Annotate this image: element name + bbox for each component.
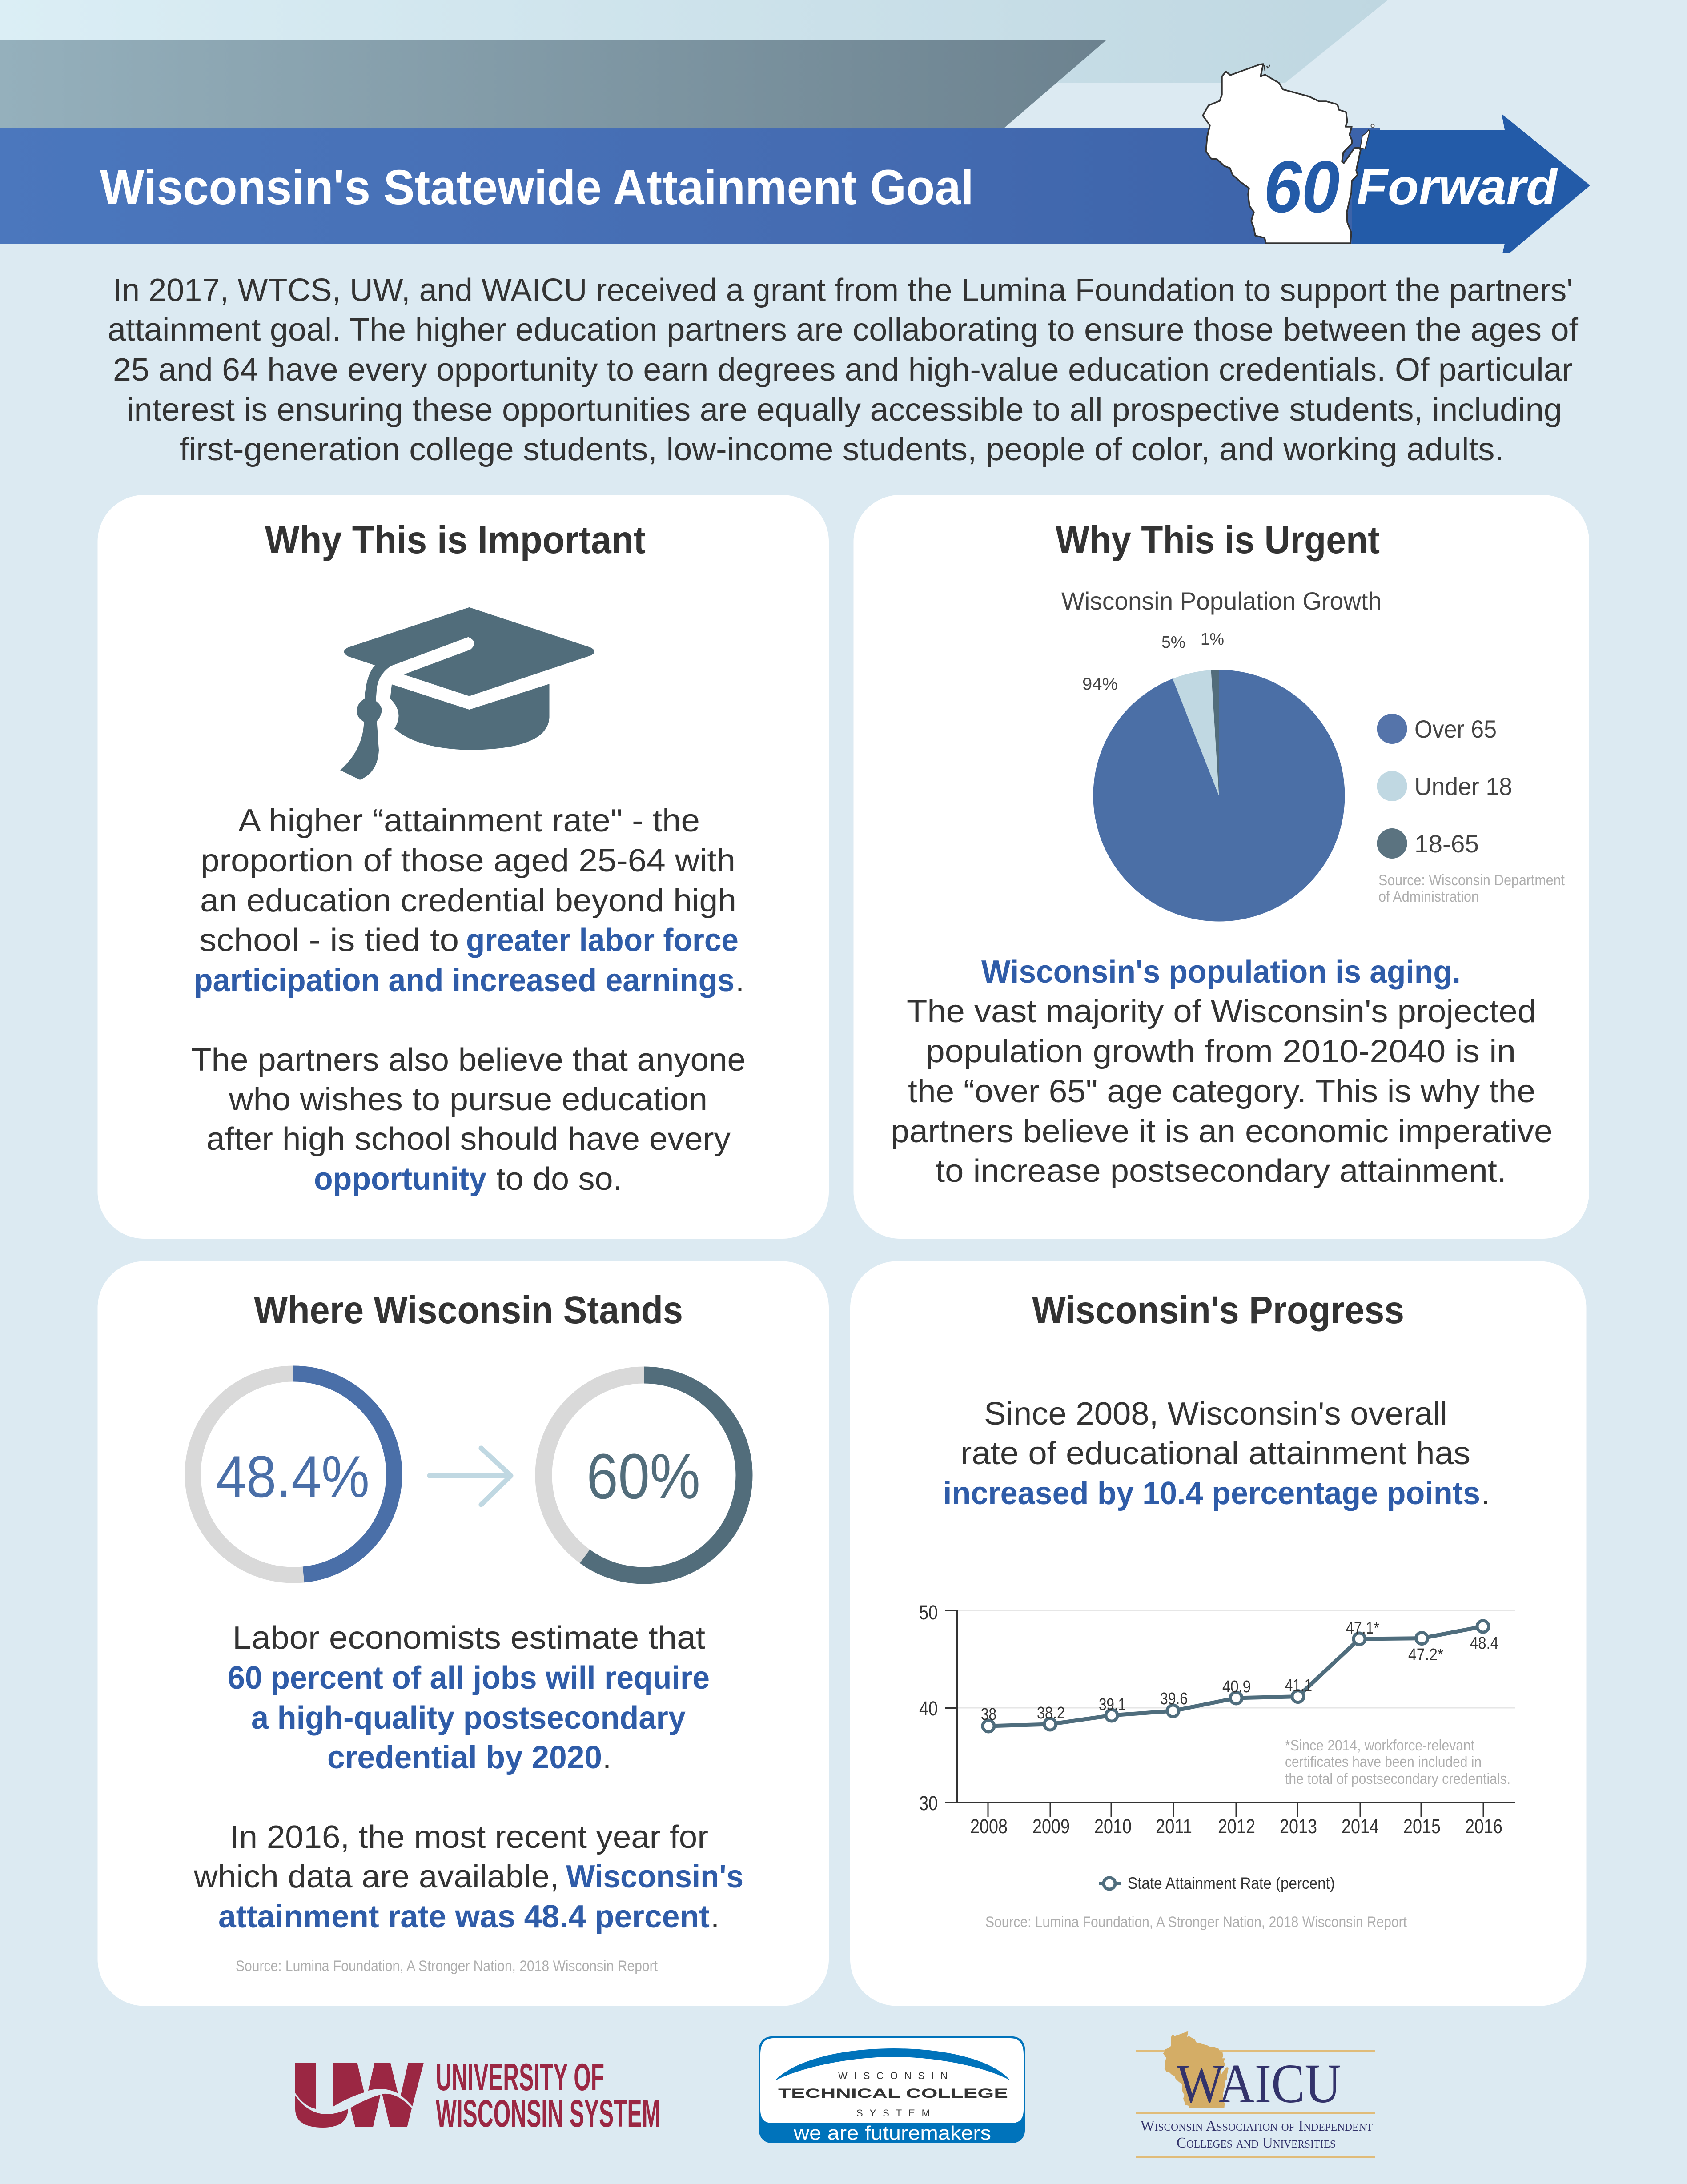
legend: 18-65	[1414, 830, 1479, 858]
logo: Wisconsin Technical College System	[759, 2036, 1025, 2144]
data labels: 40.9	[1222, 1678, 1251, 1696]
intro paragraph: attainment goal. The higher education partners are collaborating to ensure those between the ages of	[108, 312, 1579, 348]
arrow	[430, 1448, 511, 1505]
body text: credential by 2020	[327, 1740, 602, 1775]
chart footnote	[1285, 1737, 1510, 1787]
header arrow: 60 Forward	[0, 114, 1590, 253]
title: Wisconsin's Statewide Attainment Goal	[100, 160, 974, 215]
body text: The partners also believe that anyone	[191, 1042, 746, 1078]
body text: 60 percent of all jobs will require	[228, 1660, 710, 1696]
chart legend: State Attainment Rate (percent)	[1128, 1874, 1335, 1892]
body text: Wisconsin's population is aging.	[981, 954, 1461, 990]
data labels	[981, 1619, 1498, 1724]
body text: A higher “attainment rate" - the	[238, 803, 700, 839]
data labels: 39.1	[1099, 1695, 1126, 1714]
logo text: Forward: Forward	[1357, 159, 1558, 215]
body text: Labor economists estimate that	[233, 1620, 705, 1656]
axis labels: 2014	[1342, 1815, 1379, 1838]
axis labels: 2008	[970, 1815, 1008, 1838]
body text: greater labor force	[466, 923, 739, 958]
chart footnote: certificates have been included in	[1285, 1754, 1482, 1770]
source note: Source: Lumina Foundation, A Stronger Nation, 2018 Wisconsin Report	[236, 1958, 658, 1975]
body text: The vast majority of Wisconsin's projected	[907, 994, 1536, 1029]
heading: Why This is Urgent	[1056, 518, 1380, 562]
logo: WAICU	[1136, 2031, 1375, 2158]
data labels: 47.2*	[1408, 1646, 1443, 1664]
body text: a high-quality postsecondary	[251, 1700, 686, 1736]
logo text: 60: 60	[1264, 146, 1340, 228]
source note: Source: Lumina Foundation, A Stronger Nation, 2018 Wisconsin Report	[985, 1914, 1407, 1931]
panel: Why This is Urgent	[854, 495, 1589, 1239]
chart title: Wisconsin Population Growth	[1061, 587, 1382, 615]
body text: which data are available,	[193, 1859, 559, 1895]
body text: after high school should have every	[206, 1121, 731, 1157]
axis labels: 30	[919, 1792, 938, 1815]
pie chart: 94%	[1082, 675, 1118, 694]
panel: Wisconsin's Progress	[850, 1261, 1587, 2006]
body text	[891, 954, 1553, 1189]
axis labels: 2010	[1094, 1815, 1132, 1838]
body text: participation and increased earnings	[194, 963, 735, 998]
pie chart	[1082, 630, 1345, 921]
source note: Source: Wisconsin Department	[1378, 872, 1565, 889]
logo: Wisconsin Technical College System: we are futuremakers	[793, 2122, 991, 2144]
body text: an education credential beyond high	[200, 883, 736, 919]
axis labels: 40	[919, 1697, 938, 1720]
body text: partners believe it is an economic imperative	[891, 1114, 1553, 1149]
logo: University of Wisconsin System: WISCONSIN SYSTEM	[436, 2092, 660, 2135]
body text: .	[1481, 1476, 1490, 1511]
data labels: 41.1	[1285, 1676, 1312, 1695]
legend	[1377, 714, 1512, 859]
intro paragraph	[108, 273, 1579, 467]
intro paragraph: interest is ensuring these opportunities are equally accessible to all prospective students, including	[127, 392, 1562, 428]
axis labels: 2012	[1218, 1815, 1255, 1838]
legend: Over 65	[1414, 715, 1497, 743]
line chart	[919, 1601, 1515, 1838]
icon: Wisconsin state outline	[1203, 64, 1374, 243]
body text: Since 2008, Wisconsin's overall	[984, 1396, 1447, 1432]
axis labels: 2011	[1156, 1815, 1192, 1838]
body text	[191, 803, 746, 1197]
source note: of Administration	[1378, 888, 1479, 905]
chart footnote: *Since 2014, workforce-relevant	[1285, 1737, 1474, 1754]
body text: the “over 65" age category. This is why the	[908, 1074, 1535, 1109]
heading: Why This is Important	[265, 518, 646, 562]
axis labels: 50	[919, 1601, 938, 1624]
axis labels: 2009	[1032, 1815, 1070, 1838]
heading: Wisconsin's Progress	[1032, 1289, 1404, 1332]
body text	[943, 1396, 1490, 1511]
body text: attainment rate was 48.4 percent	[218, 1899, 710, 1935]
data markers	[983, 1621, 1489, 1732]
body text: population growth from 2010-2040 is in	[926, 1034, 1516, 1069]
logo: WAICU: Wisconsin Association of Independent	[1141, 2118, 1373, 2134]
legend: Under 18	[1414, 772, 1512, 800]
data labels: 47.1*	[1346, 1619, 1379, 1638]
axis labels: 2016	[1465, 1815, 1502, 1838]
body text: who wishes to pursue education	[229, 1082, 707, 1117]
axis labels	[919, 1601, 1502, 1838]
chart footnote: the total of postsecondary credentials.	[1285, 1770, 1510, 1787]
donut: 48.4%	[193, 1374, 394, 1575]
logo: Wisconsin Technical College System: SYSTEM	[856, 2108, 930, 2119]
donut: 60%: 60%	[586, 1441, 700, 1512]
body text: opportunity	[314, 1161, 486, 1197]
source note	[1378, 872, 1565, 905]
logo: University of Wisconsin System	[295, 2056, 660, 2135]
intro paragraph: first-generation college students, low-income students, people of color, and working adults.	[180, 432, 1504, 467]
data line	[988, 1626, 1483, 1726]
heading: Where Wisconsin Stands	[254, 1289, 683, 1332]
pie chart: 5%	[1161, 633, 1185, 652]
logo: WAICU: Colleges and Universities	[1177, 2135, 1336, 2151]
axis labels: 2015	[1403, 1815, 1441, 1838]
header background bands	[0, 0, 1388, 128]
body text: rate of educational attainment has	[960, 1436, 1470, 1471]
data labels: 38.2	[1037, 1704, 1065, 1722]
body text	[193, 1620, 743, 1935]
body text: to do so.	[496, 1161, 622, 1197]
pie chart: 1%	[1201, 630, 1224, 649]
body text: school - is tied to	[199, 923, 459, 958]
logo: University of Wisconsin System: UNIVERSITY OF	[436, 2056, 604, 2099]
panel: Why This is Important	[98, 495, 829, 1239]
data labels: 39.6	[1160, 1690, 1188, 1708]
logo: Wisconsin Technical College System: TECHNICAL COLLEGE	[778, 2086, 1008, 2101]
logo: Wisconsin Technical College System: WISCONSIN	[838, 2070, 948, 2081]
body text: .	[735, 963, 744, 998]
body text: Wisconsin's	[566, 1859, 743, 1895]
donut: 60%	[543, 1375, 744, 1576]
body text: proportion of those aged 25-64 with	[201, 843, 735, 879]
axis labels: 2013	[1280, 1815, 1317, 1838]
logo: WAICU: WAICU	[1177, 2053, 1341, 2115]
body text: In 2016, the most recent year for	[230, 1819, 708, 1855]
intro paragraph: 25 and 64 have every opportunity to earn degrees and high-value education credentials. Of particular	[113, 352, 1573, 388]
panel: Where Wisconsin Stands	[98, 1261, 829, 2006]
body text: increased by 10.4 percentage points	[943, 1476, 1480, 1511]
body text: to increase postsecondary attainment.	[936, 1153, 1506, 1189]
data labels: 48.4	[1470, 1634, 1498, 1653]
body text: .	[602, 1740, 611, 1775]
body text: .	[711, 1899, 719, 1935]
intro paragraph: In 2017, WTCS, UW, and WAICU received a grant from the Lumina Foundation to support the partners'	[113, 273, 1573, 308]
data labels: 38	[981, 1705, 996, 1724]
donut: 48.4%: 48.4%	[216, 1444, 370, 1510]
icon: graduation cap	[340, 607, 594, 780]
